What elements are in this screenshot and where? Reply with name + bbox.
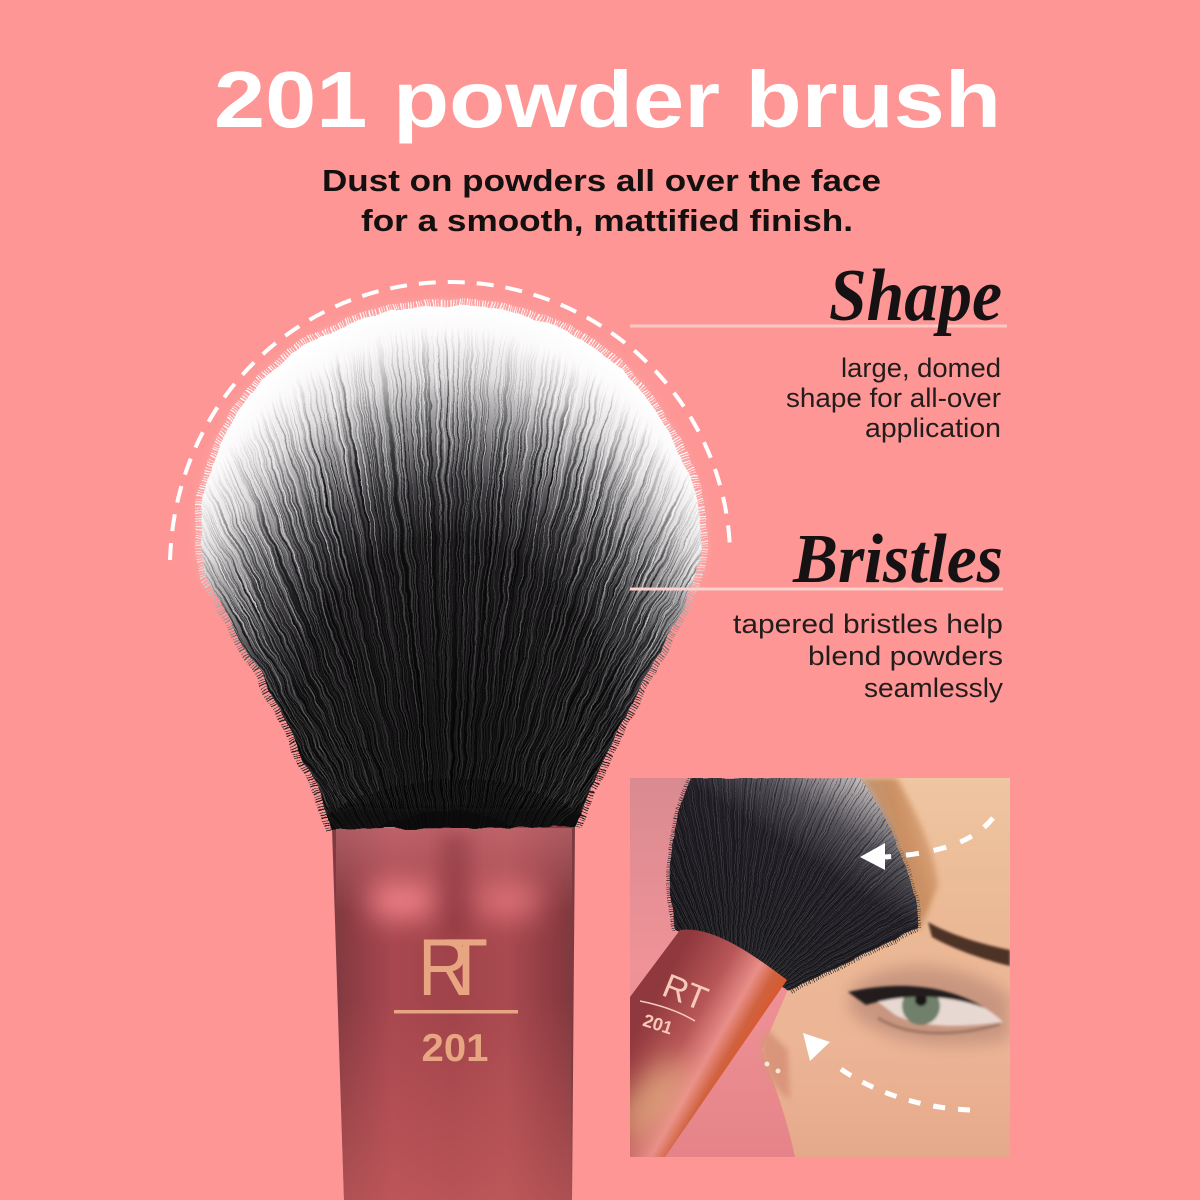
eyebrow	[928, 922, 1010, 966]
inset handle logo: RT	[657, 967, 713, 1019]
title: 201 powder brush	[214, 55, 1001, 144]
eyelid shadow	[850, 966, 1010, 1046]
inset brush handle	[630, 930, 787, 1157]
brush handle	[332, 826, 575, 1200]
subtitle	[322, 163, 881, 238]
callout: shape	[630, 255, 1007, 337]
inset handle logo: 201	[640, 1010, 675, 1038]
handle logo: T	[444, 923, 488, 1013]
inset photo	[630, 778, 1010, 1157]
shape description: large, domed	[841, 353, 1001, 383]
brush head glow	[201, 305, 702, 580]
arrow: upper	[860, 818, 993, 870]
handle logo: 201	[422, 1027, 488, 1070]
handle logo: R	[418, 923, 470, 1013]
shape description: shape for all-over	[786, 383, 1001, 413]
subtitle: for a smooth, mattified finish.	[361, 203, 853, 238]
bristles heading: Bristles	[792, 521, 1003, 598]
bristles description	[733, 609, 1004, 703]
face skin	[762, 778, 1010, 1157]
inset handle logo	[640, 974, 710, 1034]
ear	[762, 1030, 790, 1100]
bristles description: seamlessly	[864, 673, 1004, 703]
arrow: lower	[803, 1033, 970, 1110]
handle logo	[394, 923, 518, 1070]
shape heading: Shape	[829, 255, 1002, 337]
shape description	[786, 353, 1001, 443]
dashed dome outline	[170, 282, 730, 560]
brush head bristles	[194, 298, 708, 832]
inset brush fringe	[835, 778, 938, 930]
bristles description: tapered bristles help	[733, 609, 1003, 639]
subtitle: Dust on powders all over the face	[322, 163, 881, 198]
callout: bristles	[630, 521, 1003, 598]
bristles description: blend powders	[808, 641, 1003, 671]
shape description: application	[865, 413, 1001, 443]
eye	[848, 986, 1003, 1033]
inset brush bristles	[666, 778, 922, 994]
